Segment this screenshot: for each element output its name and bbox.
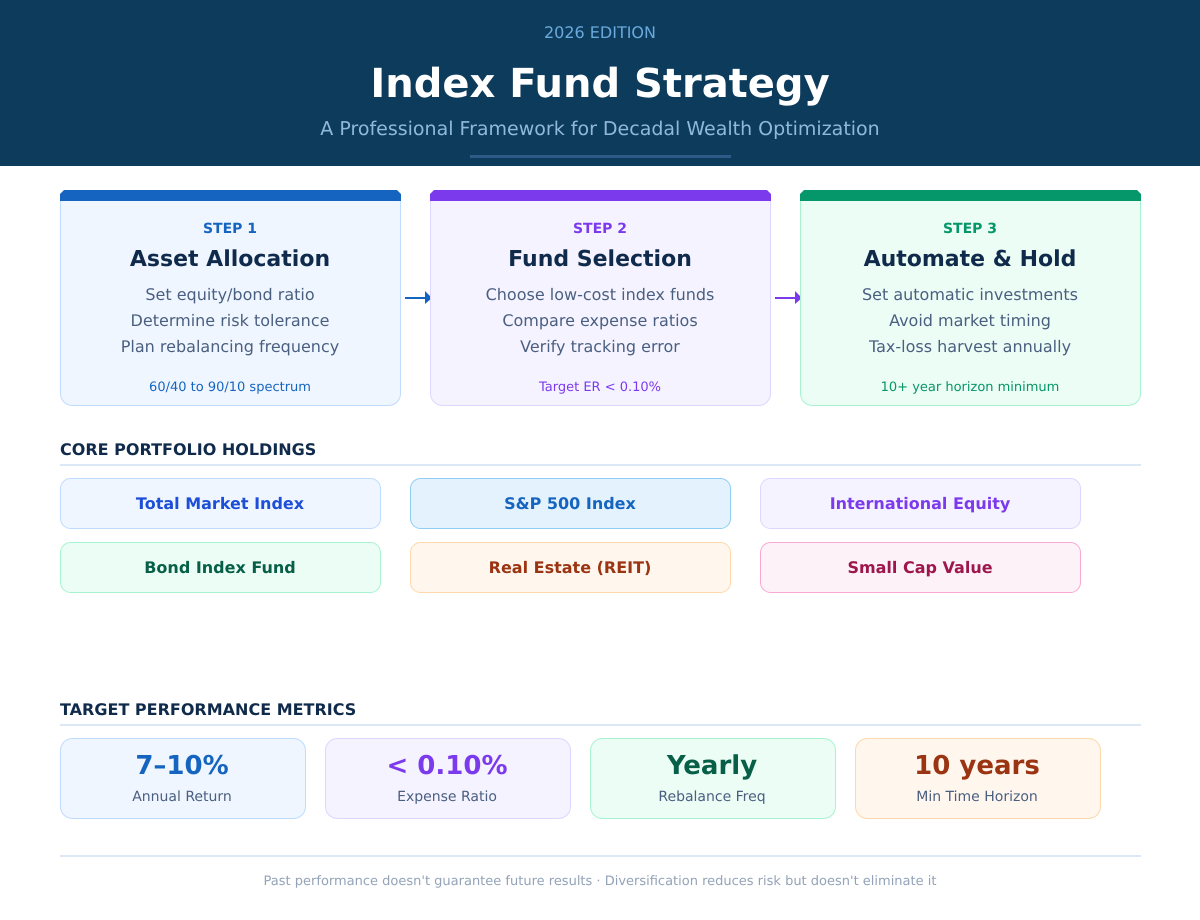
- metric: rebalance: Rebalance Freq: [658, 789, 766, 805]
- holding: s&p 500: S&P 500 Index: [504, 494, 637, 513]
- step items: Plan rebalancing frequency: [121, 337, 339, 356]
- arrow: step 1 to step 2: [405, 291, 432, 304]
- metric: expense ratio: < 0.10%: [386, 751, 508, 781]
- header rule: [470, 155, 731, 158]
- step heading: Asset Allocation: [130, 247, 330, 272]
- edition label: 2026 EDITION: [544, 23, 656, 42]
- step items: Determine risk tolerance: [131, 311, 329, 330]
- step note: 60/40 to 90/10 spectrum: [149, 380, 311, 395]
- metric: annual return: 7–10%: [135, 751, 229, 781]
- holding: small cap: Small Cap Value: [847, 558, 993, 577]
- metric: expense ratio: Expense Ratio: [397, 789, 497, 805]
- metric: annual return: [60, 738, 306, 818]
- step items: Avoid market timing: [889, 311, 1051, 330]
- panel: step 1: [60, 190, 401, 406]
- holding: international: [760, 478, 1080, 528]
- panel: step 2: [430, 190, 771, 406]
- metric: rebalance: Yearly: [666, 751, 757, 781]
- metric: time horizon: 10 years: [914, 751, 1040, 781]
- metric: time horizon: [856, 738, 1100, 818]
- metric: time horizon: Min Time Horizon: [916, 789, 1038, 805]
- holding: bond: Bond Index Fund: [144, 558, 296, 577]
- step items: [486, 285, 714, 356]
- holding: international: International Equity: [830, 494, 1011, 513]
- holding: bond: [60, 542, 380, 592]
- holding: total market: Total Market Index: [136, 494, 305, 513]
- step heading: Automate & Hold: [864, 247, 1076, 272]
- footer: Past performance doesn't guarantee future results · Diversification reduces risk but doesn't eliminate it: [264, 874, 936, 889]
- step items: Tax-loss harvest annually: [868, 337, 1071, 356]
- holding: s&p 500: [410, 478, 730, 528]
- step items: Set automatic investments: [862, 285, 1078, 304]
- section heading: metrics: TARGET PERFORMANCE METRICS: [60, 700, 356, 719]
- step heading: Fund Selection: [508, 247, 692, 272]
- holding: small cap: [760, 542, 1080, 592]
- title: Index Fund Strategy: [370, 61, 830, 107]
- step items: Set equity/bond ratio: [145, 285, 315, 304]
- step items: [862, 285, 1078, 356]
- holding: reit: Real Estate (REIT): [489, 558, 651, 577]
- metric: annual return: Annual Return: [132, 789, 232, 805]
- step note: 10+ year horizon minimum: [881, 380, 1059, 395]
- holding: reit: [410, 542, 730, 592]
- step items: Verify tracking error: [520, 337, 680, 356]
- section heading: holdings: CORE PORTFOLIO HOLDINGS: [60, 440, 316, 459]
- step items: Compare expense ratios: [502, 311, 698, 330]
- arrow: step 2 to step 3: [775, 291, 802, 304]
- subtitle: A Professional Framework for Decadal Wealth Optimization: [320, 118, 880, 140]
- metric: expense ratio: [326, 738, 570, 818]
- metric: rebalance: [590, 738, 836, 818]
- holding: total market: [60, 478, 380, 528]
- panel: step 3: [800, 190, 1141, 406]
- step label: STEP 1: [203, 221, 257, 237]
- header banner: [0, 0, 1200, 166]
- step label: STEP 2: [573, 221, 627, 237]
- step label: STEP 3: [943, 221, 997, 237]
- step items: [121, 285, 339, 356]
- step items: Choose low-cost index funds: [486, 285, 714, 304]
- step note: Target ER < 0.10%: [538, 380, 661, 395]
